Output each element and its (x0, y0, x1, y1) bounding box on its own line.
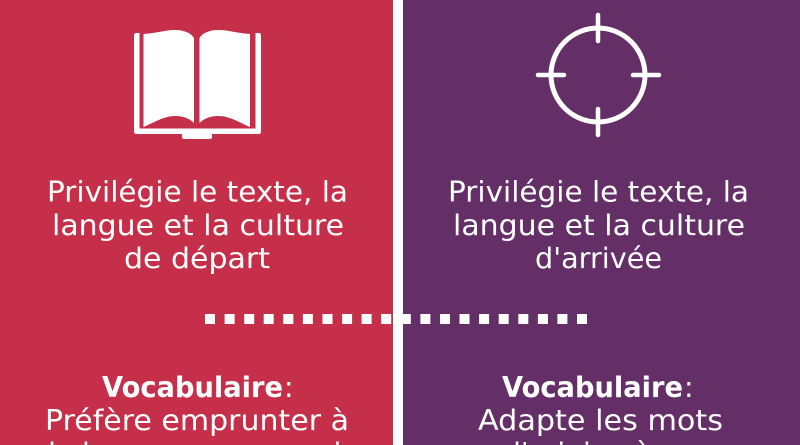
panel: source-oriented translation (0, 0, 393, 445)
text: source priority: de départ (124, 242, 270, 275)
text: source vocabulary: : (284, 371, 294, 404)
text: target priority: langue et la culture (453, 209, 745, 242)
text: source vocabulary: Préfère emprunter à (45, 404, 349, 437)
text: target vocabulary (478, 371, 723, 445)
icon: crosshair target (538, 15, 659, 135)
text: target priority: Privilégie le texte, la (448, 176, 749, 208)
text: target vocabulary: : (684, 371, 694, 404)
text: source vocabulary (38, 371, 356, 445)
text: source priority: Privilégie le texte, la (47, 176, 348, 208)
text: target vocabulary: Vocabulaire (502, 371, 683, 404)
text: target vocabulary: Adapte les mots (478, 404, 723, 437)
text: source priority: langue et la culture (52, 209, 344, 242)
dotted separator (205, 314, 587, 324)
text: source priority (47, 176, 348, 275)
text: target priority (448, 176, 749, 275)
text: source vocabulary: Vocabulaire (102, 371, 283, 404)
icon: open book (134, 30, 261, 139)
panel: target-oriented translation (403, 0, 800, 445)
text: target priority: d'arrivée (535, 242, 662, 275)
